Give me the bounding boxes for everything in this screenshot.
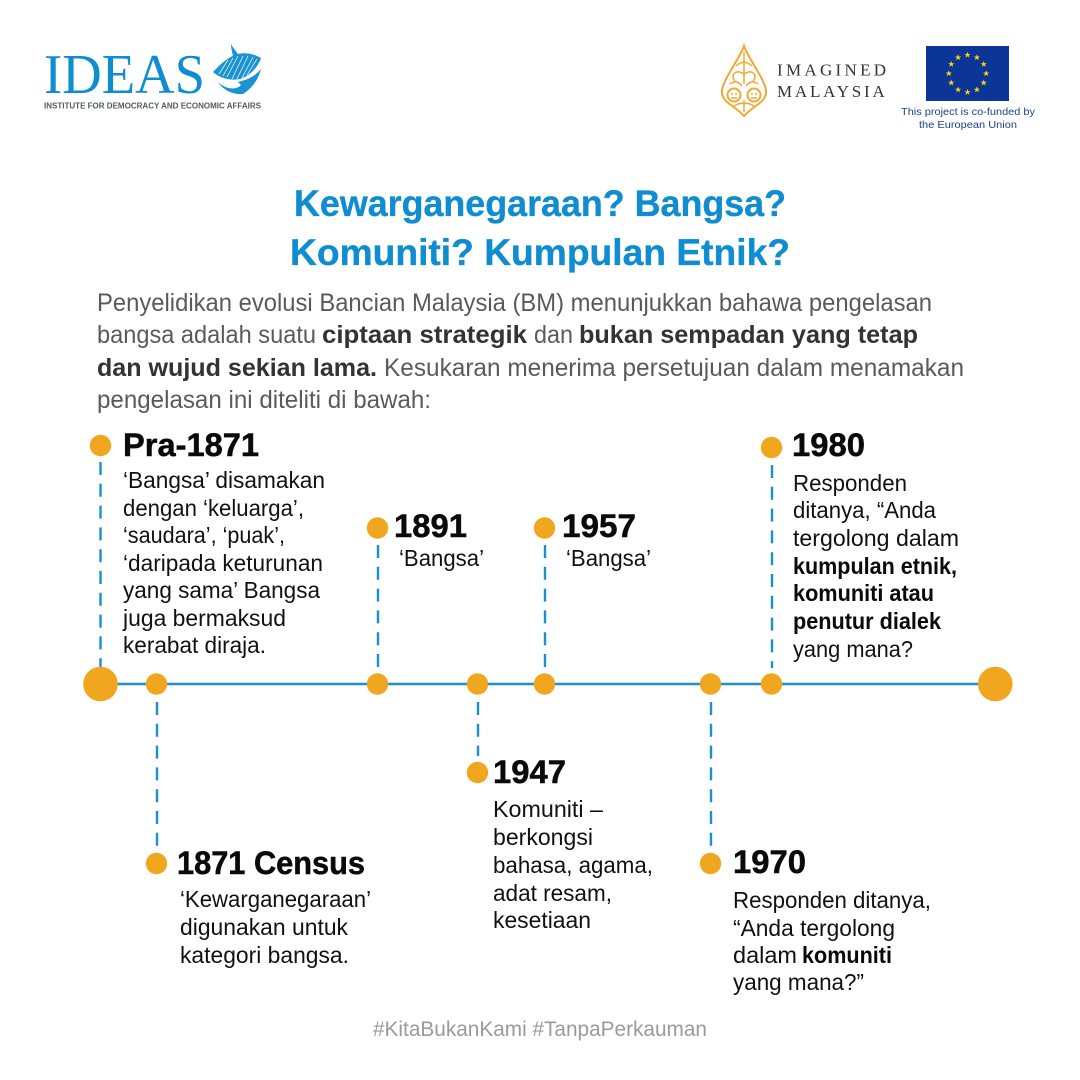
description: komuniti [802, 942, 892, 968]
logo text line 1: IMAGINED [777, 60, 889, 80]
logo wordmark: IDEAS [44, 44, 205, 106]
description: ditanya, “Anda [793, 497, 936, 523]
marker dot [367, 517, 388, 539]
description: bahasa, agama, [493, 852, 653, 878]
heading: 1891 [394, 508, 467, 544]
description [733, 887, 931, 995]
description: juga bermaksud [122, 605, 286, 631]
intro paragraph: bangsa adalah suatu [97, 321, 316, 349]
heading: 1980 [792, 427, 865, 463]
heading: 1970 [733, 844, 806, 880]
description: yang mana? [793, 636, 913, 662]
description: yang mana?” [733, 969, 864, 995]
title: Kewarganegaraan? Bangsa? [294, 183, 786, 224]
hashtags: #KitaBukanKami #TanpaPerkauman [373, 1018, 707, 1041]
description: kesetiaan [493, 907, 591, 933]
description: digunakan untuk [180, 914, 348, 940]
description: ‘Kewarganegaraan’ [180, 886, 371, 912]
timeline [83, 462, 1013, 848]
icon: EU flag [926, 46, 1009, 101]
marker dot [761, 437, 782, 458]
event: 1970 [700, 844, 931, 995]
description: tergolong dalam [793, 525, 959, 551]
description: adat resam, [493, 880, 612, 906]
event: 1891 [367, 508, 484, 571]
intro paragraph: Penyelidikan evolusi Bancian Malaysia (BM) menunjukkan bahawa pengelasan [97, 289, 932, 317]
description [493, 796, 653, 933]
description: ‘saudara’, ‘puak’, [123, 522, 285, 548]
title [290, 183, 790, 273]
description: dengan ‘keluarga’, [123, 495, 304, 521]
event: 1980 [761, 427, 959, 662]
description: kategori bangsa. [180, 942, 349, 968]
marker dot [467, 762, 488, 783]
marker dot [700, 853, 721, 874]
icon: IDEAS bird [213, 44, 261, 94]
intro paragraph: dan wujud sekian lama. [97, 354, 377, 382]
marker dot [90, 435, 111, 456]
description: Responden [793, 470, 907, 496]
logo: IDEAS [44, 44, 262, 110]
description: ‘Bangsa’ [399, 545, 484, 571]
timeline axis [100, 683, 995, 685]
icon: wayang kulit motif [722, 46, 766, 116]
timeline markers [83, 667, 1013, 701]
intro paragraph: dan [534, 321, 573, 349]
description [793, 470, 959, 662]
marker dot [534, 517, 555, 539]
funding note: This project is co-funded by [901, 106, 1036, 118]
description [122, 467, 325, 658]
heading: 1947 [493, 754, 566, 790]
intro paragraph [97, 289, 964, 414]
intro paragraph: ciptaan strategik [322, 321, 527, 349]
intro paragraph: bukan sempadan yang tetap [579, 321, 918, 349]
title: Komuniti? Kumpulan Etnik? [290, 232, 790, 273]
event: 1957 [534, 508, 651, 571]
description [180, 886, 371, 968]
intro paragraph: pengelasan ini diteliti di bawah: [97, 386, 431, 414]
connector lines [100, 462, 772, 848]
intro paragraph: Kesukaran menerima persetujuan dalam menamakan [384, 354, 964, 382]
description: ‘Bangsa’ disamakan [123, 467, 325, 493]
description: ‘daripada keturunan [123, 550, 323, 576]
event: 1871 Census [146, 845, 371, 968]
heading: 1957 [562, 508, 636, 544]
marker dot [146, 853, 167, 874]
description: yang sama’ Bangsa [123, 577, 320, 603]
logo tagline: INSTITUTE FOR DEMOCRACY AND ECONOMIC AFFAIRS [44, 102, 262, 110]
description: kerabat diraja. [123, 632, 266, 658]
logo: Imagined Malaysia [722, 46, 889, 116]
description: komuniti atau [793, 580, 934, 606]
description: kumpulan etnik, [793, 553, 957, 579]
description: penutur dialek [793, 608, 941, 634]
funding note: the European Union [919, 119, 1017, 131]
description: ‘Bangsa’ [566, 545, 651, 571]
event: Pra-1871 [90, 427, 325, 658]
description: Responden ditanya, [733, 887, 931, 913]
description: berkongsi [493, 824, 593, 850]
logo: EU flag and funding note [901, 46, 1036, 131]
description: Komuniti – [493, 796, 603, 822]
heading: 1871 Census [177, 845, 365, 881]
description: dalam [733, 942, 797, 968]
description: “Anda tergolong [733, 915, 895, 941]
funding note [901, 106, 1036, 131]
heading: Pra-1871 [123, 427, 259, 463]
event: 1947 [467, 754, 653, 933]
logo text line 2: MALAYSIA [777, 82, 888, 101]
